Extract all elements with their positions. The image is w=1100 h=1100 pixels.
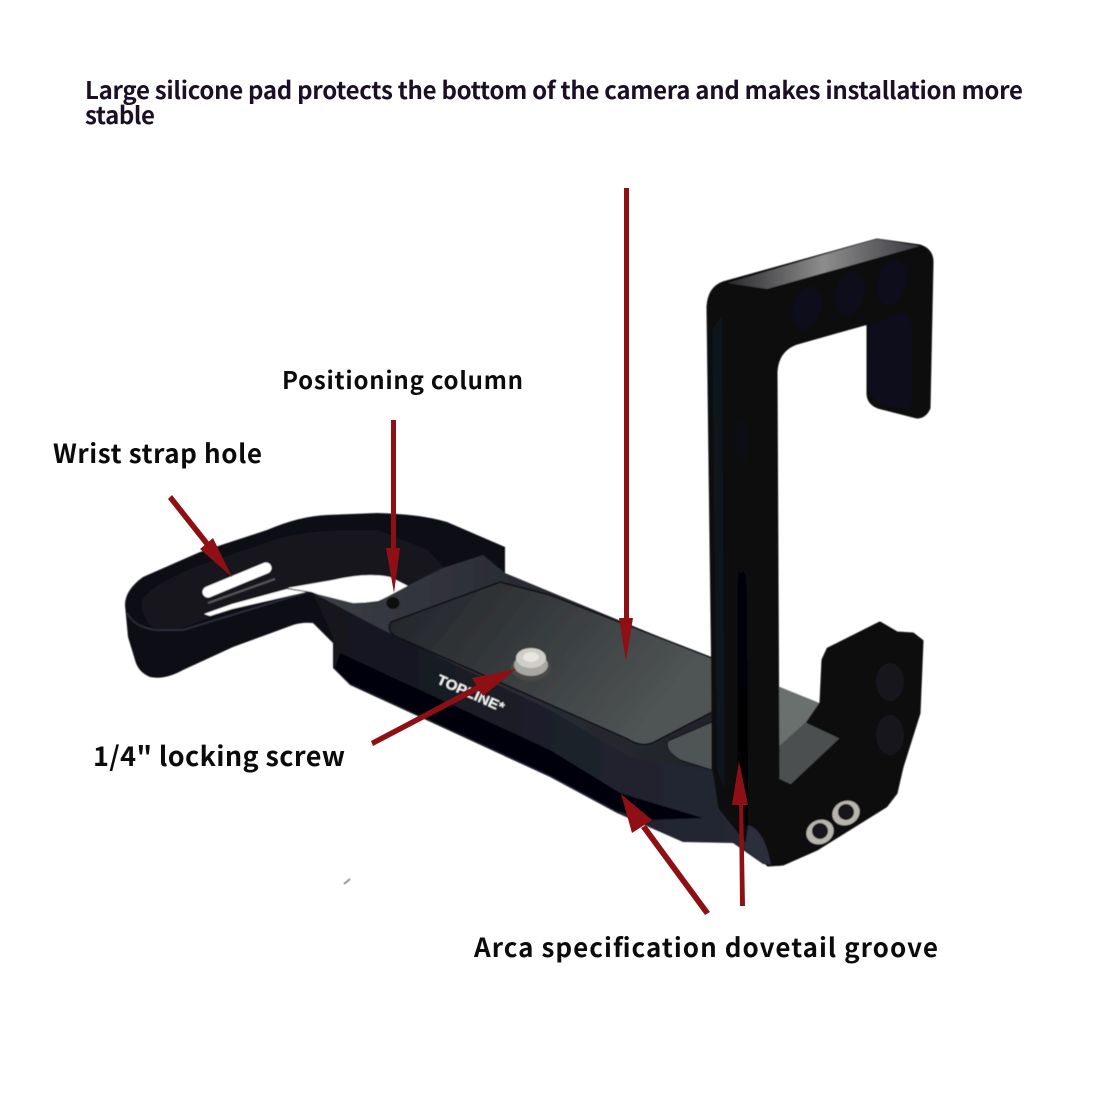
upper hook face (868, 312, 912, 410)
base side face (313, 593, 780, 866)
bottom screws (802, 796, 864, 849)
title: Large silicone pad protects the bottom of the camera and makes installation more (85, 71, 1023, 106)
slot inner wall (208, 579, 275, 603)
arrow: dovetail groove right (732, 761, 748, 906)
label: wrist strap hole: Wrist strap hole (53, 434, 262, 471)
stray mark (344, 879, 350, 884)
arrow: dovetail groove left (621, 794, 710, 915)
brand text: TOPLINE* (435, 671, 508, 715)
arrow: silicone pad (619, 188, 633, 661)
dovetail groove (335, 653, 703, 820)
arrow: locking screw (371, 669, 516, 746)
label: locking screw: 1/4" locking screw (93, 735, 345, 774)
slot lower sliver (204, 589, 306, 616)
inner cut-out opening (287, 575, 410, 604)
top mounting holes (788, 257, 911, 333)
silicone pad (389, 582, 712, 744)
arrow: wrist strap hole (168, 495, 232, 577)
base top surface (313, 555, 720, 772)
product photo: L-bracket (125, 239, 932, 884)
upright top bevel (727, 239, 920, 289)
arrow: positioning column (386, 420, 400, 593)
rear base surface (775, 685, 822, 752)
strap slot (208, 568, 266, 592)
corner highlight (745, 825, 771, 865)
title (85, 71, 1023, 131)
label: dovetail groove: Arca specification dovetail groove (473, 928, 938, 965)
grip rim highlight (127, 592, 307, 630)
rear base lower surface (775, 720, 845, 790)
front recess (667, 722, 712, 770)
title: stable (85, 96, 155, 131)
grip arm (125, 513, 505, 678)
positioning post (386, 597, 400, 609)
upright frame (708, 240, 932, 865)
upright side highlight (712, 315, 725, 790)
locking screw (511, 648, 551, 681)
label: positioning column: Positioning column (282, 361, 523, 396)
upright centre channel (737, 420, 748, 828)
grip inner floor (142, 530, 444, 631)
lower block holes (876, 663, 904, 755)
